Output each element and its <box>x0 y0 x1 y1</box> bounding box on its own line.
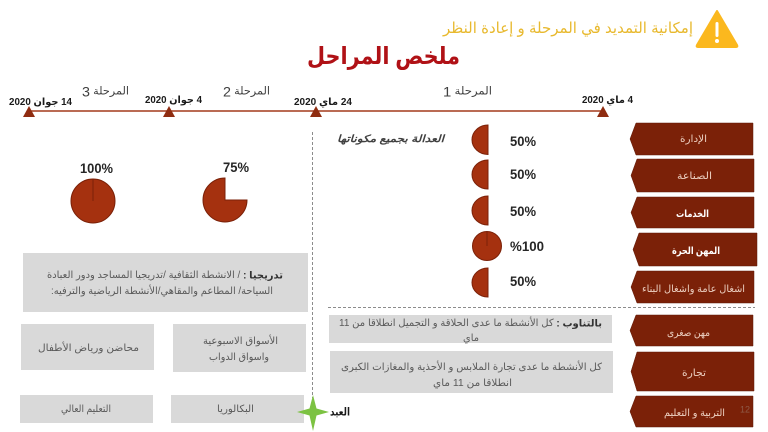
pie: phase 3, 100% <box>71 179 115 223</box>
date: 4 May: 4 ماي 2020 <box>582 95 633 106</box>
panel: weekly markets <box>173 324 306 372</box>
tab: services: الخدمات <box>676 209 709 220</box>
tab: small trades <box>630 315 753 346</box>
percentage: liberal professions: %100 <box>510 238 544 254</box>
date: 4 June: 4 جوان 2020 <box>145 95 202 106</box>
percentage: administration: 50% <box>510 133 537 149</box>
title: ملخص المراحل <box>307 43 460 70</box>
half pie: industry <box>472 160 488 189</box>
vertical dashed divider <box>312 132 314 398</box>
date: 24 May: 24 ماي 2020 <box>294 97 352 108</box>
tab: public works <box>631 271 754 303</box>
marker: 14 June <box>23 106 35 117</box>
tab: liberal professions: المهن الحرة <box>672 246 720 257</box>
marker: 4 May <box>597 106 609 117</box>
tab: administration: الإدارة <box>680 134 707 145</box>
panel: nurseries <box>21 324 154 370</box>
percentage: public works: 50% <box>510 273 537 289</box>
percentage: services: 50% <box>510 203 537 219</box>
full pie: liberal professions <box>472 232 502 260</box>
pie: phase 2, 75% <box>203 178 247 222</box>
tab: commerce <box>631 352 754 391</box>
tab: industry: الصناعة <box>677 171 712 182</box>
panel: rotation activities <box>329 315 612 344</box>
page number: 12 <box>740 404 750 414</box>
tab: small trades: مهن صغرى <box>667 328 710 339</box>
panel: gradual activities <box>23 253 308 312</box>
text: weekly markets line 1: الأسواق الاسبوعية <box>203 334 278 347</box>
tab: liberal professions <box>633 233 757 266</box>
text: rotation line 1: بالتناوب : كل الأنشطة ما عدى الحلاقة و التجميل انطلاقا من 11 <box>339 316 602 329</box>
phase 3 label: المرحلة 3 <box>82 84 129 100</box>
text: gradual activities line 2: السياحة/ المطاعم والمقاهي/الأنشطة الرياضية والترفيه: <box>51 284 273 297</box>
phase 2 label: المرحلة 2 <box>223 84 270 100</box>
warning heading: إمكانية التمديد في المرحلة و إعادة النظر <box>442 20 693 38</box>
icon: green star <box>297 395 329 431</box>
percentage: phase 3: 100% <box>80 160 114 176</box>
timeline <box>9 84 633 117</box>
text: higher education: التعليم العالي <box>61 404 111 415</box>
horizontal dashed divider <box>328 306 755 308</box>
text: commerce line 2: انطلاقا من 11 ماي <box>433 378 512 389</box>
marker: 4 June <box>163 106 175 117</box>
text: baccalaureate: البكالوريا <box>217 404 254 415</box>
tab: industry <box>631 159 754 192</box>
icon: warning triangle <box>697 11 737 47</box>
label: Eid: العيد <box>330 406 350 418</box>
tab: services <box>631 197 754 228</box>
text: rotation line 2: ماي <box>463 333 479 344</box>
panel: higher education <box>20 395 153 423</box>
marker: 24 May <box>310 106 322 117</box>
tab: commerce: تجارة <box>682 368 706 379</box>
tab: education: التربية و التعليم <box>664 408 725 419</box>
panel: baccalaureate <box>171 395 304 423</box>
percentage: phase 2: 75% <box>223 159 250 175</box>
phase 1 label: المرحلة 1 <box>443 84 492 100</box>
tab: public works: اشغال عامة واشغال البناء <box>642 284 745 295</box>
text: gradual activities line 1: تدريجيا : / الانشطة الثقافية /تدريجيا المساجد ودور العبادة <box>47 270 283 281</box>
panel: commerce activities <box>330 351 613 393</box>
note: justice: العدالة بجميع مكوناتها <box>337 134 447 145</box>
half pie: administration <box>472 125 488 154</box>
percentage: industry: 50% <box>510 166 537 182</box>
text: nurseries: محاضن ورياض الأطفال <box>38 341 139 354</box>
half pie: public works <box>472 268 488 297</box>
half pie: services <box>472 196 488 225</box>
text: weekly markets line 2: واسواق الدواب <box>209 352 269 363</box>
date: 14 June: 14 جوان 2020 <box>9 97 72 108</box>
text: commerce line 1: كل الأنشطة ما عدى تجارة الملابس و الأحذية والمغازات الكبرى <box>341 360 602 373</box>
tab: administration <box>630 123 753 155</box>
tab: education <box>630 396 753 427</box>
